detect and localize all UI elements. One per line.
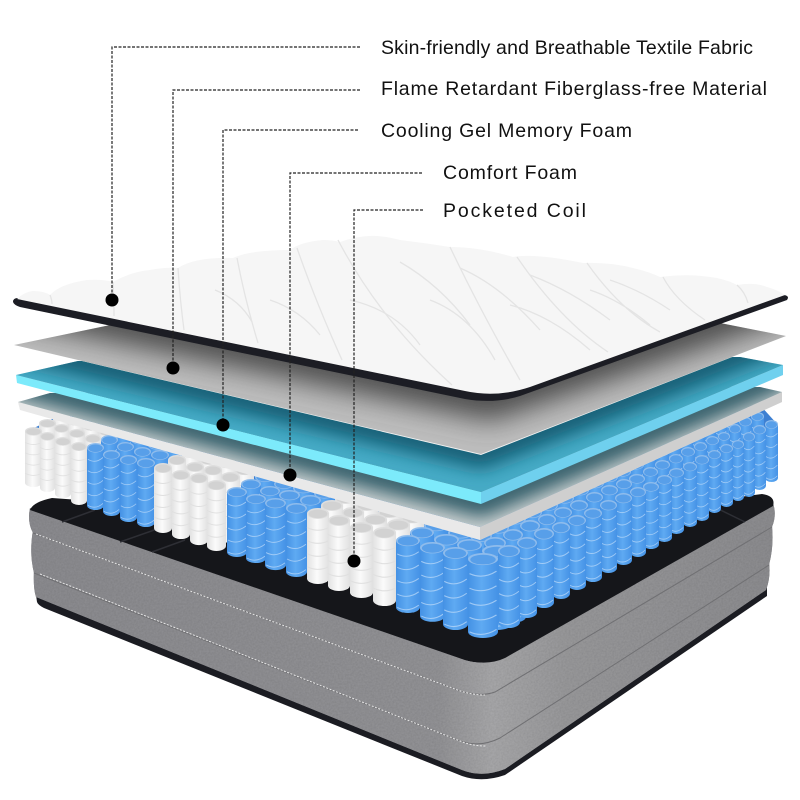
top textile fabric layer: [13, 236, 788, 401]
back row of left coils: [53, 412, 526, 623]
marker dot: comfort foam: [284, 468, 296, 482]
marker dot: pocketed coil: [348, 554, 360, 568]
base upper band: [29, 503, 775, 694]
middle row of left coils: [39, 419, 512, 630]
marker dot: gel memory foam: [216, 418, 230, 432]
pocketed coil layer: [25, 405, 778, 638]
label: pocketed coil: Pocketed Coil: [443, 200, 586, 222]
comfort foam front faces: [18, 392, 782, 540]
fabric black edge: [13, 295, 788, 401]
gel foam left face: [16, 375, 481, 504]
front right coil row: [498, 420, 778, 628]
fabric quilted surface: [17, 236, 785, 394]
flame retardant sheet surface: [14, 323, 786, 454]
base lower band: [34, 562, 770, 774]
marker dot: textile fabric: [106, 294, 118, 306]
base band seams: [33, 527, 772, 744]
label: comfort foam: Comfort Foam: [443, 162, 577, 184]
label: textile fabric: Skin-friendly and Breathable Textile Fabric: [381, 37, 753, 59]
leader line: gel memory foam: [223, 130, 358, 425]
label: fiberglass-free material: Flame Retardant Fiberglass-free Material: [381, 78, 767, 100]
mattress base: [29, 494, 775, 779]
marker dot: fiberglass-free material: [166, 362, 180, 374]
middle row of right coils: [484, 412, 764, 620]
comfort foam top surface: [18, 387, 782, 527]
base fabric bands: [29, 503, 775, 774]
leader line: textile fabric: [112, 47, 360, 300]
fabric quilting stitches: [50, 240, 748, 385]
flame retardant material layer: [14, 323, 786, 455]
leader line: fiberglass-free material: [173, 90, 360, 368]
gel foam right face: [481, 365, 783, 504]
gel foam top surface: [16, 357, 783, 492]
flame retardant sheet edge: [14, 336, 786, 455]
leader line: comfort foam: [290, 173, 422, 475]
front left coil row: [25, 427, 498, 638]
base middle band: [31, 526, 773, 744]
back row of right coils: [470, 405, 750, 613]
base bottom strip: [36, 585, 767, 779]
leader line: pocketed coil: [354, 210, 423, 561]
coil back fill: [30, 405, 778, 560]
cooling gel memory foam layer: [16, 357, 783, 504]
base stitching: [36, 534, 486, 746]
label: gel memory foam: Cooling Gel Memory Foam: [381, 120, 632, 142]
comfort foam layer: [18, 387, 782, 540]
base top panel seams: [62, 500, 745, 552]
base black top surface: [30, 494, 774, 663]
